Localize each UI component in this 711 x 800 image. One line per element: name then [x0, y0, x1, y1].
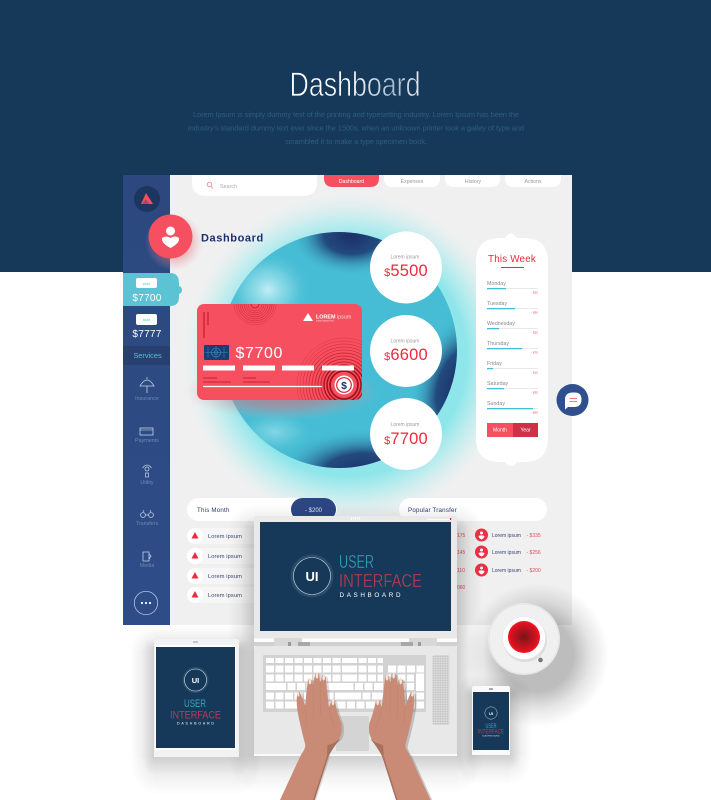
day: wednesday: [487, 321, 538, 334]
day: tuesday: [487, 301, 538, 314]
intro paragraph: scrambled it to make a type specimen book.: [285, 137, 427, 146]
menu: media: [140, 552, 154, 569]
row: Lorem ipsum: [492, 533, 521, 539]
ui badge: UI: [306, 569, 318, 584]
menu: insurance: Insurance: [135, 396, 159, 402]
menu: utility: [140, 465, 154, 486]
stat circle 5500: [370, 232, 442, 304]
ui badge: [290, 554, 334, 598]
keyboard: [263, 655, 426, 712]
this month pill: [187, 498, 337, 521]
this month pill: This Month: [197, 507, 230, 514]
screen title: USER: [339, 552, 374, 572]
card detail lines: [203, 377, 256, 379]
this week heading: This Week: [488, 254, 536, 265]
phone title: DASHBOARD: [482, 734, 500, 738]
card bars: [204, 312, 208, 338]
row: Lorem ipsum: [492, 568, 521, 574]
day: monday: [487, 281, 538, 294]
stat circle 7700: Lorem ipsum: [391, 422, 419, 428]
partial amounts: 060: [457, 585, 466, 591]
tab: history: [445, 175, 500, 187]
stat circle 5500: $5500: [384, 262, 428, 280]
laptop: [254, 516, 457, 756]
tablet title: DASHBOARD: [177, 722, 214, 726]
card coin: $: [341, 380, 347, 392]
sidebar: [123, 175, 182, 625]
day: saturday: - $35: [531, 390, 538, 394]
row: - $200: [526, 568, 541, 574]
phone: [472, 686, 510, 755]
stat circle 6600: [370, 315, 442, 387]
tablet: [154, 639, 239, 757]
day: monday: - $30: [531, 290, 538, 294]
balance tab active: ####: [143, 282, 150, 286]
card shadow: [193, 378, 375, 418]
phone title: [478, 724, 504, 738]
tab: history: History: [465, 179, 481, 185]
month year toggle: Year: [520, 428, 531, 434]
panel: dashboard window: [170, 175, 572, 625]
card brand: [303, 313, 352, 322]
tab: expenses: [384, 175, 440, 187]
phone title: INTERFACE: [478, 730, 504, 736]
card brand: LOREM ipsum: [316, 314, 352, 320]
tablet badge: UI: [192, 676, 199, 685]
partial amounts: [457, 533, 466, 591]
row: [475, 564, 541, 576]
intro paragraph: Lorem Ipsum is simply dummy text of the printing and typesetting industry. Lorem Ipsum has been the: [193, 110, 519, 119]
tab: actions: Actions: [524, 179, 542, 185]
card brand: lorem ipsum text: [316, 320, 334, 322]
day: thursday: Thursday: [487, 341, 509, 347]
services band: Services: [133, 351, 162, 360]
day: wednesday: Wednesday: [487, 321, 515, 327]
phone badge: UI: [489, 711, 493, 716]
day: thursday: [487, 341, 538, 354]
credit card: [197, 304, 362, 400]
day: tuesday: - $50: [531, 310, 538, 314]
balance second: $7777: [132, 329, 162, 340]
search bar: Search: [220, 184, 237, 190]
intro paragraph: industry's standard dummy text ever since the 1500s, when an unknown printer took a galley of type and: [188, 124, 524, 132]
list: this month: [187, 528, 267, 603]
stat circle 6600: Lorem ipsum: [391, 338, 419, 344]
left hand: [280, 673, 344, 800]
row: [475, 528, 541, 542]
menu: transfers: Transfers: [136, 521, 159, 527]
sphere: [230, 232, 457, 468]
card ripple top: [234, 304, 276, 326]
right hand: [369, 673, 433, 800]
search bar: [192, 175, 317, 196]
day: thursday: - $70: [531, 350, 538, 354]
header band: [0, 0, 711, 272]
menu: transfers: [136, 510, 159, 527]
speaker grille: [432, 655, 450, 725]
cup shadow: [465, 583, 609, 727]
partial amounts: 110: [457, 568, 465, 574]
menu: media: Media: [140, 563, 154, 569]
day: friday: - $10: [531, 370, 538, 374]
row: Lorem ipsum: [492, 550, 521, 556]
laptop hinges: [254, 638, 457, 646]
stat circle 6600: $6600: [384, 346, 428, 364]
laptop shadow: [228, 504, 483, 792]
balance tab active: [123, 273, 182, 306]
touchpad: [336, 716, 369, 751]
tab: actions: [505, 175, 561, 187]
day: wednesday: - $20: [531, 330, 538, 334]
logo badge: [134, 186, 160, 212]
profile badge: [145, 213, 203, 271]
phone shadow: [455, 675, 532, 785]
card ripple corner: [296, 338, 362, 400]
tablet title: INTERFACE: [170, 710, 221, 722]
row: - $335: [526, 533, 541, 539]
sphere glow: [191, 201, 477, 514]
menu: insurance: [135, 377, 159, 402]
balance second: ####: [143, 318, 150, 322]
row: Lorem ipsum: [208, 534, 242, 540]
balance tab active: $7700: [132, 293, 162, 304]
day: monday: Monday: [487, 281, 506, 287]
popular transfer pill: [399, 498, 547, 521]
intro paragraph: [188, 110, 524, 146]
laptop screen: [254, 516, 457, 642]
day: sunday: - $90: [531, 410, 538, 414]
month year toggle: [487, 423, 538, 437]
page title: Dashboard: [290, 66, 420, 104]
dashboard heading: Dashboard: [201, 232, 264, 244]
tablet title: [170, 698, 221, 726]
day: sunday: Sunday: [487, 401, 505, 407]
tab: expenses: Expenses: [401, 179, 424, 185]
stat circle 5500: Lorem ipsum: [391, 254, 419, 260]
this month pill: - $200: [305, 508, 323, 514]
stat circle 7700: $7700: [384, 430, 428, 448]
more button: [134, 591, 158, 615]
this week panel: [476, 234, 548, 466]
popular transfer pill: Popular Transfer: [408, 507, 457, 514]
card chip: [204, 345, 229, 360]
card number stripes: [203, 366, 354, 370]
partial amounts: 175: [457, 533, 466, 539]
screen title: INTERFACE: [339, 571, 422, 591]
laptop base: [254, 646, 457, 756]
day: friday: Friday: [487, 361, 502, 367]
menu: payments: [135, 428, 159, 444]
tab: dashboard: Dashboard: [339, 179, 364, 185]
row: Lorem ipsum: [208, 554, 242, 560]
screen title: DASHBOARD: [340, 592, 401, 599]
list: popular transfer: [475, 528, 541, 576]
day: sunday: [487, 401, 538, 414]
partial amounts: 145: [457, 550, 466, 556]
menu: utility: Utility: [140, 480, 154, 486]
stat circle 7700: [370, 398, 442, 470]
month year toggle: Month: [493, 428, 507, 434]
tab: dashboard: [324, 175, 379, 187]
day: tuesday: Tuesday: [487, 301, 507, 307]
row: [475, 546, 541, 558]
card amount: $7700: [236, 345, 283, 362]
row: Lorem ipsum: [208, 593, 242, 599]
chat bubble button: [556, 384, 588, 416]
tablet title: USER: [184, 698, 206, 710]
day: friday: [487, 361, 538, 374]
balance second: [132, 314, 162, 340]
services band: [123, 346, 170, 365]
card coin: [334, 376, 354, 394]
tablet shadow: [130, 626, 263, 795]
phone title: USER: [486, 724, 497, 730]
coffee cup: [488, 603, 560, 675]
row: Lorem ipsum: [208, 574, 242, 580]
day: saturday: Saturday: [487, 381, 509, 387]
menu: payments: Payments: [135, 438, 159, 444]
day: saturday: [487, 381, 538, 394]
row: - $256: [526, 550, 541, 556]
screen title: [339, 552, 422, 599]
